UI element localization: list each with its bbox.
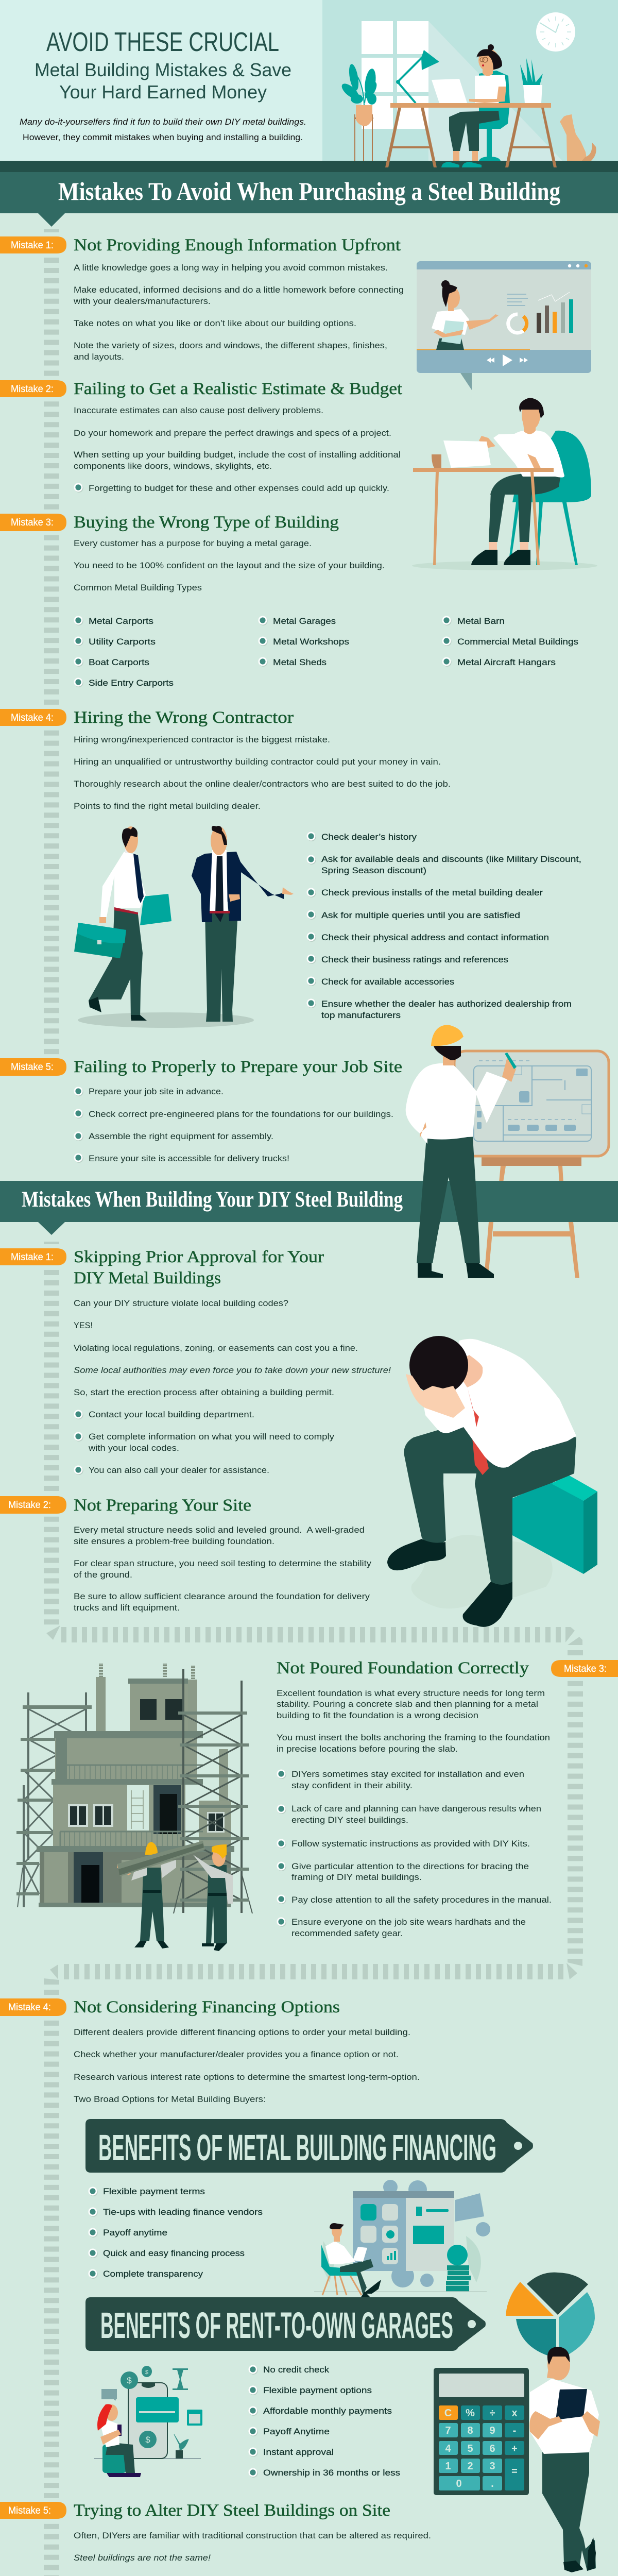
left man: [74, 826, 171, 1021]
list: dealer checks: Ask for multiple queries until you are satisfied: [321, 910, 520, 920]
body text: and layouts.: [74, 352, 124, 362]
body text: [74, 1525, 372, 1613]
badge: mistake 5: [0, 2502, 66, 2519]
list: rent-to-own benefits: Payoff Anytime: [263, 2427, 330, 2436]
body text: Thoroughly research about the online dealer/contractors who are best suited to do the job.: [74, 779, 451, 789]
chart: pie: [506, 2273, 595, 2360]
list: installation tips: framing of DIY metal buildings.: [291, 1872, 422, 1882]
list: building types: Metal Aircraft Hangars: [457, 657, 556, 667]
heading: Not Providing Enough Information Upfront: [74, 236, 401, 255]
list: installation tips: [277, 1769, 552, 1938]
badge: mistake 2: Mistake 2:: [11, 384, 54, 395]
body text: components like doors, windows, skylights, etc.: [74, 461, 272, 471]
body text: [74, 735, 451, 811]
s2 mistake 3: foundation: [277, 1659, 618, 1938]
illustration: woman with phone: [94, 2366, 202, 2477]
section banner 2: [0, 1181, 618, 1235]
body text: with your dealers/manufacturers.: [73, 296, 211, 306]
body text: Often, DIYers are familiar with traditional construction that can be altered as required.: [74, 2531, 431, 2540]
body text: Get complete information on what you will need to comply: [89, 1432, 335, 1442]
list: installation tips: DIYers sometimes stay excited for installation and even: [291, 1769, 524, 1779]
illustration: man with tablet: [529, 2347, 600, 2572]
left scaffolding: [16, 1692, 92, 1907]
calculator keys: 6: [489, 2443, 495, 2454]
list: site preparation: Assemble the right equipment for assembly.: [89, 1131, 273, 1141]
body text: [73, 263, 404, 362]
body text: Take notes on what you like or don’t like about our building options.: [74, 318, 356, 328]
list: building types: Metal Sheds: [273, 657, 327, 667]
body text: Different dealers provide different financing options to order your metal building.: [74, 2027, 410, 2037]
body text: Steel buildings are not the same!: [74, 2553, 211, 2563]
list: rent-to-own benefits: No credit check: [263, 2365, 330, 2375]
chat bubble: [101, 2389, 117, 2401]
body text: building to fit the foundation is a wrong decision: [277, 1710, 478, 1720]
body text: [74, 2531, 558, 2576]
illustration: engineer at board: [406, 1025, 579, 1278]
list: installation tips: erecting DIY steel buildings.: [291, 1815, 408, 1825]
main title: [35, 27, 291, 103]
calculator keys: %: [466, 2408, 475, 2419]
icon: wall clock: [536, 12, 575, 52]
illustration: woman with phone: $: [145, 2435, 150, 2445]
main title: Metal Building Mistakes & Save: [35, 59, 291, 80]
woman figure: [432, 44, 510, 163]
heading: DIY Metal Buildings: [74, 1269, 221, 1287]
body text: Check whether your manufacturer/dealer provides you a finance option or not.: [74, 2049, 399, 2059]
list: dealer checks: Check dealer’s history: [321, 832, 417, 842]
illustration: building under construction: [16, 1664, 252, 1951]
banner: benefits of rent to own garages: [85, 2297, 486, 2351]
man figure: [471, 398, 564, 565]
badge: mistake 1: [0, 236, 66, 253]
calculator keys: 1: [445, 2461, 451, 2472]
body text: You must insert the bolts anchoring the framing to the foundation: [277, 1733, 550, 1742]
list: building types: Metal Carports: [89, 616, 153, 626]
list: building types: Utility Carports: [89, 637, 156, 647]
calculator keys: 7: [445, 2425, 451, 2436]
coins: [121, 2366, 157, 2448]
body text: site ensures a problem-free building foundation.: [74, 1536, 274, 1546]
body text: Note the variety of sizes, doors and windows, the different shapes, finishes,: [74, 341, 387, 350]
banner: benefits of metal building financing: [85, 2119, 533, 2173]
s2 mistake 2: site prep: [0, 1496, 372, 1613]
chart: donut and bars: [507, 292, 573, 333]
badge: mistake 3: [0, 514, 66, 531]
body text: in precise locations before pouring the slab.: [277, 1744, 458, 1754]
list: dealer checks: Spring Season discount): [321, 866, 426, 875]
calculator keys: ÷: [490, 2408, 495, 2419]
body text: Inaccurate estimates can also cause post delivery problems.: [74, 405, 323, 415]
heading: Not Poured Foundation Correctly: [277, 1659, 529, 1677]
trousers: [404, 1420, 576, 1586]
calculator keys: 3: [489, 2461, 495, 2472]
heading: Skipping Prior Approval for Your: [74, 1248, 324, 1266]
heading: Trying to Alter DIY Steel Buildings on Site: [74, 2501, 390, 2520]
teal chair: [508, 431, 591, 565]
list: installation tips: stay confident in their ability.: [291, 1781, 413, 1790]
teal box: [512, 1475, 597, 1574]
list: installation tips: Ensure everyone on the job site wears hardhats and the: [291, 1917, 526, 1927]
body text: [74, 538, 385, 592]
intro text: However, they commit mistakes when buying and installing a building.: [23, 132, 303, 142]
body text: [277, 1688, 550, 1754]
list: rent-to-own benefits: [248, 2365, 400, 2478]
desk: [385, 103, 557, 167]
list: site preparation: Ensure your site is accessible for delivery trucks!: [89, 1154, 289, 1163]
intro text: Many do-it-yourselfers find it fun to build their own DIY metal buildings.: [20, 117, 306, 127]
list: dealer checks: Check previous installs of the metal building dealer: [321, 888, 543, 897]
badge: mistake 4: Mistake 4:: [11, 713, 54, 723]
main title: Your Hard Earned Money: [59, 81, 267, 103]
construction workers: [117, 1841, 233, 1951]
list: building types: Metal Barn: [457, 616, 505, 626]
illustration: video presentation: [417, 261, 591, 390]
list: site preparation: Prepare your job site in advance.: [89, 1087, 224, 1096]
mistake 3: wrong building type: [0, 513, 578, 688]
calculator keys: 4: [445, 2443, 451, 2454]
illustration: two businessmen: [74, 826, 294, 1028]
body text: [74, 405, 401, 493]
list: building types: Side Entry Carports: [89, 678, 174, 688]
calculator keys: +: [511, 2443, 518, 2454]
badge: mistake 3: Mistake 3:: [11, 517, 54, 528]
heading: [74, 1248, 324, 1287]
floor band: [0, 161, 618, 172]
badge: mistake 3: [551, 1660, 618, 1677]
list: rent-to-own benefits: Affordable monthly payments: [263, 2406, 392, 2416]
body text: YES!: [74, 1320, 93, 1330]
list: site preparation: Check correct pre-engineered plans for the foundations for our buildings.: [89, 1109, 393, 1119]
icon: yellow hard hats: [145, 1842, 227, 1859]
badge: mistake 4: Mistake 4:: [8, 2002, 51, 2013]
calendar: [187, 2410, 202, 2426]
body text: Research various interest rate options to determine the smartest long-term-option.: [74, 2072, 420, 2082]
icon: hard hat: [431, 1025, 464, 1046]
icon: player controls: [487, 354, 528, 366]
seated man: [321, 2223, 381, 2298]
list: installation tips: recommended safety gear.: [291, 1928, 403, 1938]
list: financing benefits: Tie-ups with leading finance vendors: [103, 2207, 263, 2217]
badge: mistake 4: [0, 1998, 66, 2016]
main title: AVOID THESE CRUCIAL: [46, 27, 279, 57]
presenter: [432, 280, 499, 350]
body text: Excellent foundation is what every structure needs for long term: [277, 1688, 545, 1698]
mistake 4: wrong contractor: [0, 708, 581, 1020]
body text: For clear span structure, you need soil testing to determine the stability: [74, 1558, 372, 1568]
blueprint: [474, 1061, 591, 1141]
body text: Forgetting to budget for these and other expenses could add up quickly.: [89, 483, 389, 493]
illustration: woman with phone: $: [127, 2376, 132, 2385]
list: dealer checks: top manufacturers: [321, 1010, 401, 1020]
list: installation tips: Give particular attention to the directions for bracing the: [291, 1861, 529, 1871]
badge: mistake 4: [0, 709, 66, 726]
body text: Points to find the right metal building dealer.: [74, 801, 261, 811]
calculator keys: 5: [467, 2443, 473, 2454]
body text: Some local authorities may even force you to take down your new structure!: [74, 1365, 391, 1375]
list: financing benefits: Complete transparency: [103, 2269, 203, 2279]
badge: mistake 1: [0, 1248, 66, 1265]
calculator keys: .: [491, 2478, 494, 2489]
calculator keys: 2: [467, 2461, 473, 2472]
list: building types: Boat Carports: [89, 657, 149, 667]
calculator keys: x: [511, 2408, 518, 2419]
calculator keys: -: [513, 2425, 516, 2436]
body text: Contact your local building department.: [89, 1410, 254, 1419]
badge: mistake 3: Mistake 3:: [564, 1664, 607, 1674]
body text: Can your DIY structure violate local building codes?: [74, 1298, 288, 1308]
body text: A little knowledge goes a long way in helping you avoid common mistakes.: [74, 263, 388, 273]
illustration: woman at desk: [0, 12, 618, 172]
building body: [37, 1664, 234, 1907]
icon: desk lamp: [396, 50, 439, 103]
heading: Not Considering Financing Options: [74, 1998, 340, 2016]
body text: [74, 2027, 420, 2104]
list: installation tips: Lack of care and planning can have dangerous results when: [291, 1804, 541, 1814]
badge: mistake 5: Mistake 5:: [8, 2505, 51, 2516]
badge: mistake 2: [0, 1496, 66, 1514]
coin stack: [446, 2245, 471, 2292]
heading: Buying the Wrong Type of Building: [74, 513, 339, 532]
list: installation tips: Follow systematic instructions as provided with DIY Kits.: [291, 1839, 530, 1849]
list: building types: [74, 616, 578, 688]
body text: When setting up your building budget, include the cost of installing additional: [74, 450, 401, 460]
body text: stability. Pouring a concrete slab and then planning for a metal: [277, 1699, 538, 1709]
body text: Be sure to allow sufficient clearance around the foundation for delivery: [74, 1591, 370, 1601]
calculator keys: 9: [489, 2425, 495, 2436]
badge: mistake 2: Mistake 2:: [8, 1500, 51, 1511]
list: dealer checks: Ensure whether the dealer has authorized dealership from: [321, 999, 572, 1009]
illustration: man at laptop: [412, 398, 597, 570]
body text: You need to be 100% confident on the layout and the size of your building.: [74, 561, 385, 570]
body text: Do your homework and prepare the perfect drawings and specs of a project.: [74, 428, 391, 438]
body text: Every customer has a purpose for buying a metal garage.: [74, 538, 312, 548]
list: financing benefits: Quick and easy financing process: [103, 2248, 245, 2258]
intro text: [20, 117, 306, 142]
plant: [174, 2434, 188, 2452]
heading: Not Preparing Your Site: [74, 1496, 251, 1515]
calculator keys: [439, 2405, 524, 2490]
section banner 1: [0, 172, 618, 227]
calculator keys: C: [444, 2408, 452, 2419]
heading: Hiring the Wrong Contractor: [74, 708, 294, 727]
badge: mistake 5: Mistake 5:: [11, 1062, 54, 1073]
mistake 5: job site: [0, 1058, 402, 1163]
list: financing benefits: [89, 2187, 263, 2279]
icon: left plant: [339, 63, 379, 161]
body text: of the ground.: [74, 1570, 132, 1580]
calculator keys: 8: [467, 2425, 473, 2436]
hourglass: [173, 2368, 188, 2390]
list: building types: Metal Garages: [273, 616, 336, 626]
illustration: calculator: [434, 2368, 529, 2495]
icon: dog: [560, 114, 596, 161]
laptop and mug: [413, 440, 554, 565]
mistake 2: failing budget: [0, 380, 402, 493]
heading: Failing to Get a Realistic Estimate & Budget: [74, 380, 402, 398]
body text: Hiring wrong/inexperienced contractor is the biggest mistake.: [74, 735, 330, 744]
list: financing benefits: Payoff anytime: [103, 2228, 167, 2238]
body text: with your local codes.: [88, 1443, 179, 1453]
body text: Hiring an unqualified or untrustworthy building contractor could put your money in vain.: [74, 757, 441, 767]
seated woman: [97, 2404, 141, 2477]
list: installation tips: Pay close attention to all the safety procedures in the manual.: [291, 1895, 552, 1905]
list: dealer checks: Check their physical address and contact information: [321, 933, 549, 942]
list: dealer checks: Ask for available deals and discounts (like Military Discount,: [321, 854, 581, 864]
badge: mistake 1: Mistake 1:: [11, 1252, 54, 1263]
icon: right plant: [520, 58, 543, 103]
s2 mistake 1: permits: [0, 1248, 391, 1475]
header panel: [0, 0, 618, 161]
badge: mistake 5: [0, 1058, 66, 1076]
right scaffolding: [174, 1669, 252, 1913]
timeline dashes: [44, 229, 582, 2576]
body text: [74, 1298, 391, 1475]
list: site preparation: [74, 1087, 393, 1163]
body text: trucks and lift equipment.: [74, 1603, 180, 1613]
body text: Common Metal Building Types: [74, 583, 202, 592]
right man: [192, 826, 294, 1022]
body text: Violating local regulations, zoning, or easements can cost you a fine.: [74, 1343, 358, 1353]
illustration: whiteboard easel: [454, 1051, 609, 1182]
illustration: stressed man sitting: [387, 1336, 597, 1627]
body text: Every metal structure needs solid and leveled ground. A well-graded: [74, 1525, 365, 1535]
list: dealer checks: Check their business ratings and references: [321, 955, 508, 964]
list: rent-to-own benefits: Ownership in 36 months or less: [263, 2468, 400, 2478]
body text: Make educated, informed decisions and do a little homework before connecting: [74, 285, 404, 295]
list: dealer checks: [307, 832, 581, 1020]
badge: mistake 2: [0, 380, 66, 397]
list: financing benefits: Flexible payment terms: [103, 2187, 205, 2196]
s2 mistake 5: altering buildings: [0, 2501, 558, 2576]
list: building types: Commercial Metal Buildings: [457, 637, 578, 647]
calculator keys: 0: [456, 2478, 462, 2489]
illustration: online banking: [314, 2180, 490, 2298]
calculator keys: =: [511, 2466, 518, 2477]
section banner 2: Mistakes When Building Your DIY Steel Building: [22, 1188, 403, 1212]
list: rent-to-own benefits: Instant approval: [263, 2447, 334, 2457]
heading: Failing to Properly to Prepare your Job Site: [74, 1058, 402, 1076]
badge: mistake 1: Mistake 1:: [11, 240, 54, 251]
s2 mistake 4: financing: [0, 1998, 420, 2104]
list: dealer checks: Check for available accessories: [321, 977, 454, 987]
mistake 1: not providing information: [0, 236, 404, 362]
body text: So, start the erection process after obtaining a building permit.: [74, 1387, 334, 1397]
body text: You can also call your dealer for assistance.: [89, 1465, 269, 1475]
list: rent-to-own benefits: Flexible payment options: [263, 2385, 372, 2395]
body text: Two Broad Options for Metal Building Buyers:: [74, 2094, 266, 2104]
list: building types: Metal Workshops: [273, 637, 349, 647]
illustration: woman with phone: $: [145, 2369, 148, 2376]
